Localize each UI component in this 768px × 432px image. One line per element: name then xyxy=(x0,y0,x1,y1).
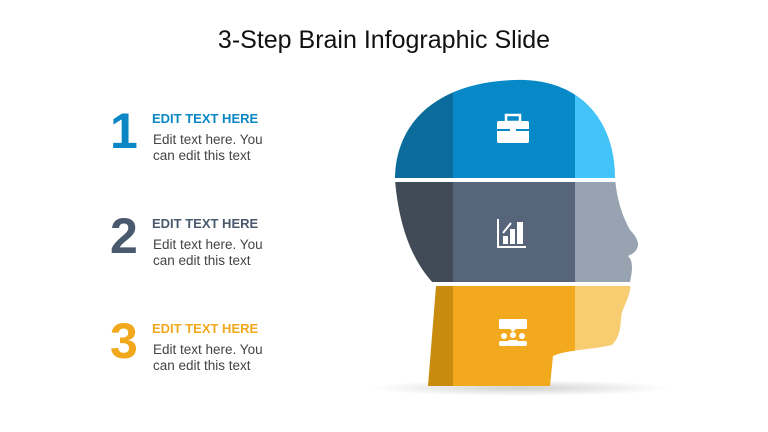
band 1 blue xyxy=(395,80,615,178)
icon: briefcase xyxy=(497,115,529,143)
item 1: EDIT TEXT HERE xyxy=(152,111,258,126)
band 2 gray xyxy=(395,182,638,282)
item 3: can edit this text xyxy=(153,358,251,373)
icon: chart xyxy=(498,219,526,247)
item 2: Edit text here. You xyxy=(153,237,263,252)
item 3 xyxy=(110,313,263,373)
icon: people presentation xyxy=(499,319,527,346)
item 2: can edit this text xyxy=(153,253,251,268)
item 1: 1 xyxy=(110,103,138,159)
item 1: can edit this text xyxy=(153,148,251,163)
item 1 xyxy=(110,103,263,163)
item 3: 3 xyxy=(110,313,138,369)
item 3: EDIT TEXT HERE xyxy=(152,321,258,336)
item 1: Edit text here. You xyxy=(153,132,263,147)
item 2 xyxy=(110,208,263,268)
head graphic xyxy=(395,80,642,394)
band 3 yellow xyxy=(428,286,630,386)
title: 3-Step Brain Infographic Slide xyxy=(218,26,550,54)
item 2: EDIT TEXT HERE xyxy=(152,216,258,231)
item 2: 2 xyxy=(110,208,138,264)
item 3: Edit text here. You xyxy=(153,342,263,357)
